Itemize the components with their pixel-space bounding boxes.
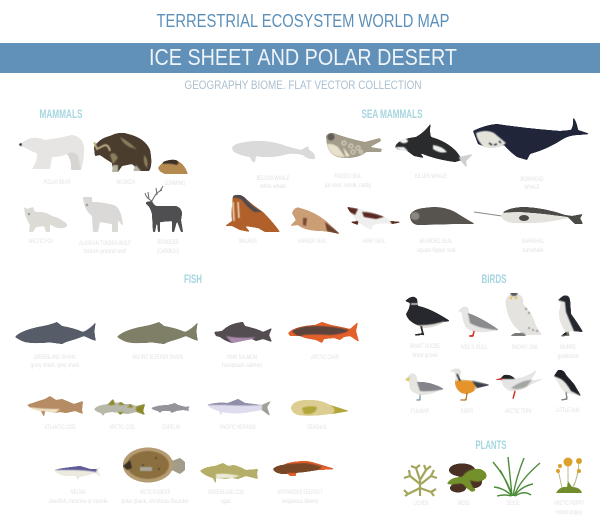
label: atlantic cod: ATLANTIC COD <box>44 424 76 431</box>
heading: sea mammals: SEA MAMMALS <box>362 107 422 121</box>
label: barren-ground wolf: barren-ground wolf <box>84 248 126 255</box>
label: pacific sleeper shark: PACIFIC SLEEPER SHARK <box>132 354 184 361</box>
heading: fish: FISH <box>184 272 202 286</box>
icon: fulmar <box>405 374 444 400</box>
label: sedge: SEDGE <box>506 500 520 507</box>
icon: arctic fox <box>24 207 67 232</box>
label: white whale: white whale <box>259 183 286 190</box>
icon: nelma <box>54 466 101 481</box>
label: whale: WHALE <box>524 184 540 191</box>
icon: reindeer <box>145 186 183 232</box>
panel: mammals <box>19 107 188 255</box>
icon: murre <box>558 296 583 336</box>
icon: pink salmon <box>214 322 272 343</box>
label: killer whale: KILLER WHALE <box>415 173 447 180</box>
label: seasnail: SEASNAIL <box>307 424 327 431</box>
icon: arctic poppy <box>556 458 582 493</box>
label: humpback salmon: humpback salmon <box>222 362 262 369</box>
icon: sedge <box>493 457 540 496</box>
title band: ICE SHEET AND POLAR DESERT <box>149 44 457 70</box>
icon: greenland shark <box>15 322 96 344</box>
heading: birds: BIRDS <box>482 272 506 286</box>
label: narwhal: NARWHAL <box>522 238 544 245</box>
label: arctic char: ARCTIC CHAR <box>311 354 339 361</box>
label: snowy owl: SNOWY OWL <box>512 344 539 351</box>
label: brent goose: brent goose <box>412 352 438 359</box>
label: ogac: ogac <box>221 498 232 505</box>
icon: polar bear <box>19 135 84 170</box>
label: greenland cod: GREENLAND COD <box>208 489 244 496</box>
label: gurry shark: gurry shark, grey shark <box>30 362 80 369</box>
icon: ringed seal <box>326 133 382 158</box>
label: polar bear: POLAR BEAR <box>44 179 71 186</box>
label: lichen: LICHEN <box>414 500 429 507</box>
icon: lichen <box>404 465 437 496</box>
icon: pacific herring <box>207 399 271 416</box>
icon: alaskan tundra wolf <box>83 197 123 232</box>
icon: atlantic cod <box>27 396 83 417</box>
label: harp seal: HARP SEAL <box>362 238 386 245</box>
label: capelin: CAPELIN <box>162 424 180 431</box>
icon: beluga whale <box>232 141 315 162</box>
label: square flipper seal: square flipper seal <box>416 247 456 254</box>
label: nelma: NELMA <box>70 489 86 496</box>
icon: snowy owl <box>506 293 542 336</box>
icon: lemming <box>158 160 188 174</box>
label: arctic tern: ARCTIC TERN <box>504 408 532 415</box>
icon: greenland cod <box>200 463 258 484</box>
label: greenland shark: GREENLAND SHARK <box>34 354 76 361</box>
icon: eider <box>449 368 490 400</box>
label: fulmar: FULMAR <box>411 408 429 415</box>
label: rooted poppy: rooted poppy <box>556 509 583 516</box>
icon: pacific sleeper shark <box>117 322 198 344</box>
label: ivel's gull: IVEL'S GULL <box>460 344 488 351</box>
heading: plants: PLANTS <box>476 438 506 452</box>
icon: harbor seal <box>290 208 340 234</box>
panel: fish: ARCTIC FLOUNDER <box>140 489 170 496</box>
panel: birds <box>405 272 583 415</box>
title band <box>0 43 600 73</box>
label: caribou: (CARIBOU) <box>157 248 179 255</box>
label: pink salmon: PINK SALMON <box>227 354 257 361</box>
icon: arctic flounder <box>123 448 185 482</box>
icon: arctic char <box>288 322 359 343</box>
label: muskox: MUSKOX <box>116 179 136 186</box>
icon: bowhead whale <box>473 117 590 160</box>
label: reindeer: REINDEER <box>158 239 179 246</box>
label: ringed seal aliases: jar seal, netsik, nattiq <box>324 182 371 189</box>
subtitle: GEOGRAPHY BIOME. FLAT VECTOR COLLECTION <box>184 80 422 92</box>
icon: seasnail <box>291 400 349 416</box>
heading: mammals: MAMMALS <box>40 107 82 121</box>
label: bearded seal: BEARDED SEAL <box>420 238 453 245</box>
label: sheefish: sheefish, inconnu or connie <box>48 498 108 505</box>
label: little auk: LITTLE AUK <box>556 407 580 414</box>
label: polar plaice: polar plaice, christmas flounder <box>122 498 189 505</box>
title: TERRESTRIAL ECOSYSTEM WORLD MAP <box>156 11 450 31</box>
label: walrus: WALRUS <box>239 238 257 245</box>
icon: moss <box>447 464 486 492</box>
label: arctic fox: ARCTIC FOX <box>28 238 54 245</box>
label: narwhale: narwhale <box>522 247 544 254</box>
icon: little auk <box>554 370 581 400</box>
label: harbor seal: HARBOR SEAL <box>298 238 327 245</box>
icon: muskox <box>94 133 151 172</box>
icon: brant goose <box>405 297 450 335</box>
label: viviparous eelpout: VIVIPAROUS EELPOUT <box>278 489 323 496</box>
label: viviparous blenny: viviparous blenny <box>282 498 319 505</box>
panel: fish <box>15 272 359 505</box>
icon: arctic cod <box>94 399 145 416</box>
icon: narwhal <box>474 207 583 224</box>
icon: arctic tern <box>493 369 545 399</box>
icon: capelin <box>151 403 190 413</box>
label: brant goose: BRANT GOOSE <box>410 343 440 350</box>
panel: sea mammals <box>225 107 590 254</box>
icon: viviparous eelpout <box>273 461 335 476</box>
label: bowhead: BOWHEAD <box>520 176 544 183</box>
label: ringed seal: RINGED SEAL <box>334 173 362 180</box>
icon: killer whale <box>395 123 473 168</box>
icon: walrus <box>225 195 280 232</box>
label: alaskan tundra wolf: ALASKAN TUNDRA WOLF <box>79 240 131 247</box>
label: arctic cod: ARCTIC COD <box>110 424 135 431</box>
label: lemming: LEMMING <box>164 180 186 187</box>
label: moss: MOSS <box>458 500 470 507</box>
label: guillemot: guillemot <box>558 353 579 360</box>
panel: plants <box>404 438 584 516</box>
icon: ivel's gull <box>458 306 499 336</box>
label: pacific herring: PACIFIC HERRING <box>220 424 256 431</box>
label: eider: EIDER <box>461 408 473 415</box>
label: murre: MURRE <box>560 344 576 351</box>
label: beluga whale: BELUGA WHALE <box>256 175 290 182</box>
icon: bearded seal <box>410 207 475 225</box>
icon: harp seal <box>347 207 402 230</box>
